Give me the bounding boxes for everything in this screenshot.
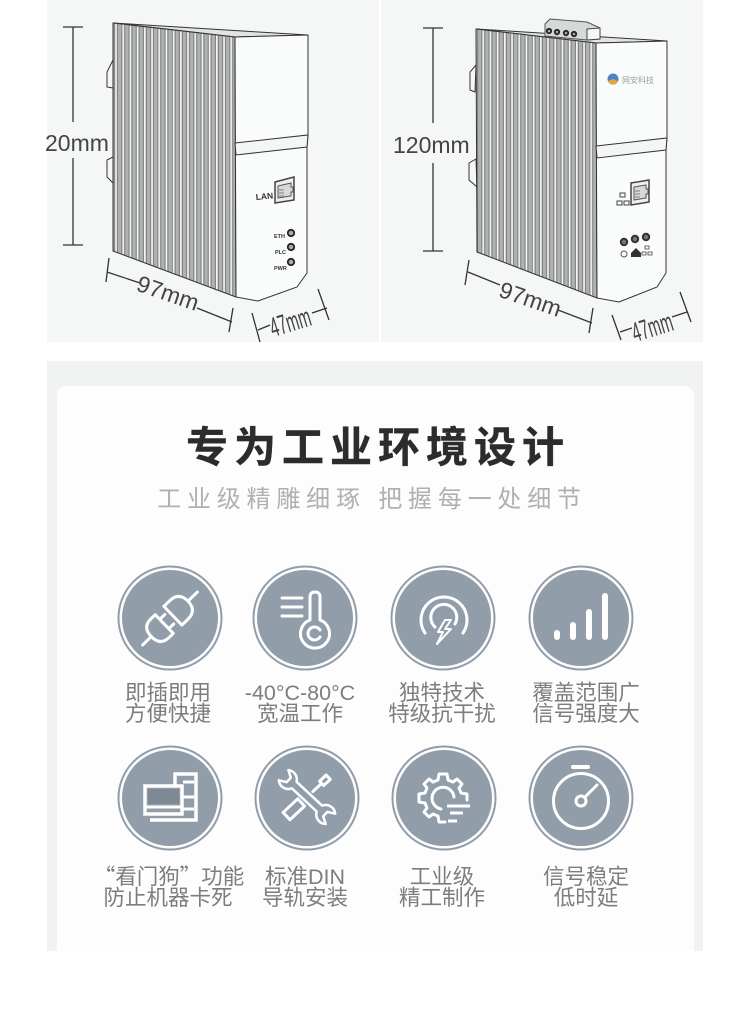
status LEDs: PLC xyxy=(275,250,286,256)
dimension: width 47mm xyxy=(252,289,329,343)
status LEDs: ETH xyxy=(274,234,285,240)
icon: computer xyxy=(145,774,196,820)
dimension: height 120mm xyxy=(393,28,470,251)
label: 方便快捷 xyxy=(125,702,211,726)
label: 覆盖范围广 xyxy=(532,681,640,705)
panel: features background xyxy=(47,361,703,951)
icon: stopwatch xyxy=(554,767,608,828)
status LEDs: PWR xyxy=(274,266,287,272)
icon: signal bars xyxy=(554,593,608,640)
network port xyxy=(617,180,649,205)
status LEDs xyxy=(274,230,294,272)
status LEDs and icons xyxy=(621,234,652,257)
feature: DIN rail mount xyxy=(256,746,358,910)
label: 防止机器卡死 xyxy=(103,886,233,910)
icon: plug xyxy=(134,583,206,654)
device: LAN model side and front xyxy=(107,23,308,301)
dimension: width 47mm: 47mm xyxy=(266,301,315,343)
brand logo: 网安科技 xyxy=(622,75,654,85)
label: 信号强度大 xyxy=(532,702,640,726)
feature: anti-interference xyxy=(388,566,496,726)
label: 标准DIN xyxy=(265,865,345,889)
dimension: length 97mm xyxy=(106,258,233,332)
dimension: length 97mm: 97mm xyxy=(134,270,202,316)
label: 独特技术 xyxy=(399,681,485,705)
LAN port xyxy=(255,177,294,203)
label: 特级抗干扰 xyxy=(388,702,496,726)
feature: wide coverage xyxy=(530,566,640,726)
subtitle: 工业级精雕细琢 把握每一处细节 xyxy=(157,486,587,513)
dimension: width 47mm xyxy=(612,292,691,348)
terminal connector xyxy=(545,19,600,40)
panel: left dimension drawing xyxy=(45,0,379,343)
icon: wrench xyxy=(277,768,337,826)
icon: thermometer xyxy=(282,592,330,648)
dimension: length 97mm xyxy=(465,260,593,333)
label: “看门狗”功能 xyxy=(94,860,244,891)
label: 即插即用 xyxy=(125,681,211,705)
label: 宽温工作 xyxy=(257,702,343,726)
label: 导轨安装 xyxy=(262,886,348,910)
feature: wide temperature xyxy=(245,566,356,726)
panel: right dimension drawing xyxy=(381,0,703,348)
feature: industrial grade xyxy=(392,746,496,910)
brand logo xyxy=(608,74,654,85)
title: 专为工业环境设计 xyxy=(186,424,570,471)
label: 精工制作 xyxy=(399,886,485,910)
device: terminal model side and front xyxy=(469,19,667,302)
feature: watchdog xyxy=(94,746,244,910)
feature: plug and play xyxy=(118,566,222,726)
dimension: height 120mm: 120mm xyxy=(393,132,470,158)
icon: screwdriver xyxy=(283,774,332,820)
dimension: width 47mm: 47mm xyxy=(628,306,677,348)
dimension: length 97mm: 97mm xyxy=(496,276,565,322)
label: 工业级 xyxy=(410,865,474,889)
feature card xyxy=(57,386,694,951)
dimension: height 120mm: 20mm xyxy=(45,130,109,156)
feature: low latency xyxy=(530,746,632,910)
label: -40°C-80°C xyxy=(245,681,355,705)
LAN port: LAN xyxy=(255,191,274,202)
label: 信号稳定 xyxy=(543,865,629,889)
dimension: height 120mm xyxy=(45,27,109,245)
icon: gear xyxy=(419,774,470,822)
label: 低时延 xyxy=(554,886,618,910)
icon: signal arcs with lightning bolt xyxy=(421,597,467,644)
